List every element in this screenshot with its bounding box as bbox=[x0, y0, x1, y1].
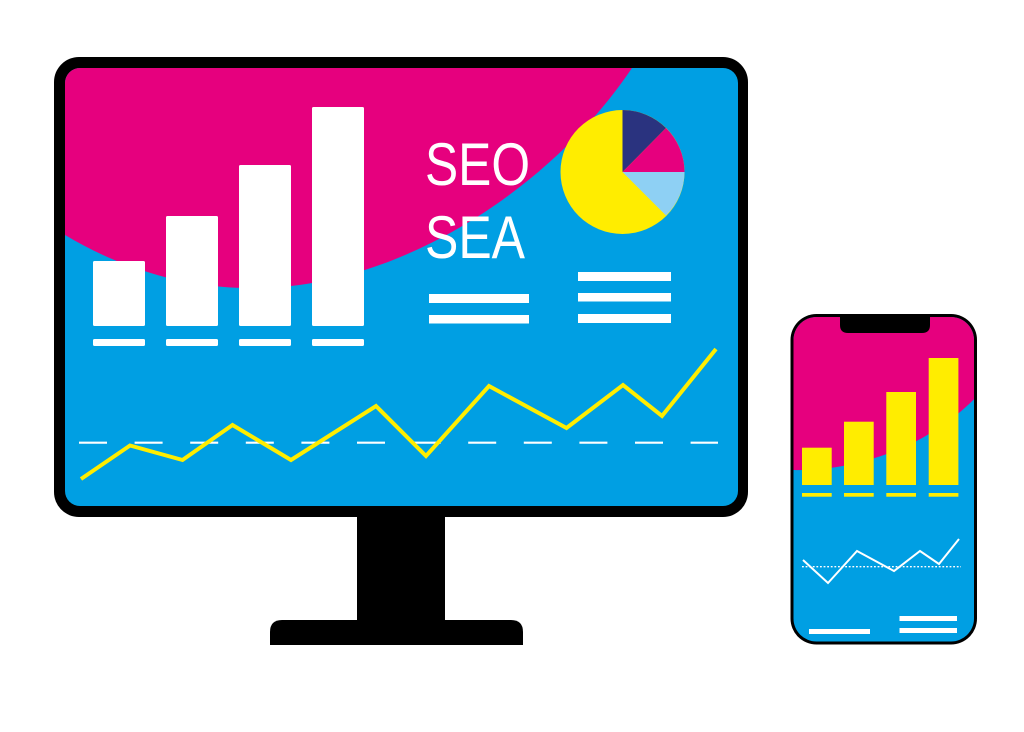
text lines left bbox=[429, 294, 529, 324]
infographic: desktop monitor and phone dashboards bbox=[54, 57, 977, 645]
monitor screen bbox=[60, 68, 738, 506]
monitor stand bbox=[270, 510, 523, 645]
phone frame bbox=[790, 314, 977, 644]
phone text lines bbox=[809, 616, 957, 634]
text lines right bbox=[578, 272, 671, 323]
phone line chart bbox=[803, 539, 959, 583]
phone dotted baseline bbox=[802, 566, 961, 568]
phone bar chart bbox=[802, 358, 958, 497]
phone bbox=[790, 310, 980, 644]
phone screen bbox=[790, 310, 980, 642]
heading: SEA: SEA bbox=[425, 204, 525, 271]
phone notch bbox=[840, 316, 930, 333]
heading: SEO: SEO bbox=[425, 131, 530, 198]
monitor frame bbox=[54, 57, 748, 517]
dashed baseline bbox=[79, 442, 718, 444]
bar chart bbox=[93, 107, 364, 346]
line chart bbox=[81, 349, 716, 479]
monitor bbox=[54, 57, 748, 645]
pie chart bbox=[560, 110, 684, 234]
